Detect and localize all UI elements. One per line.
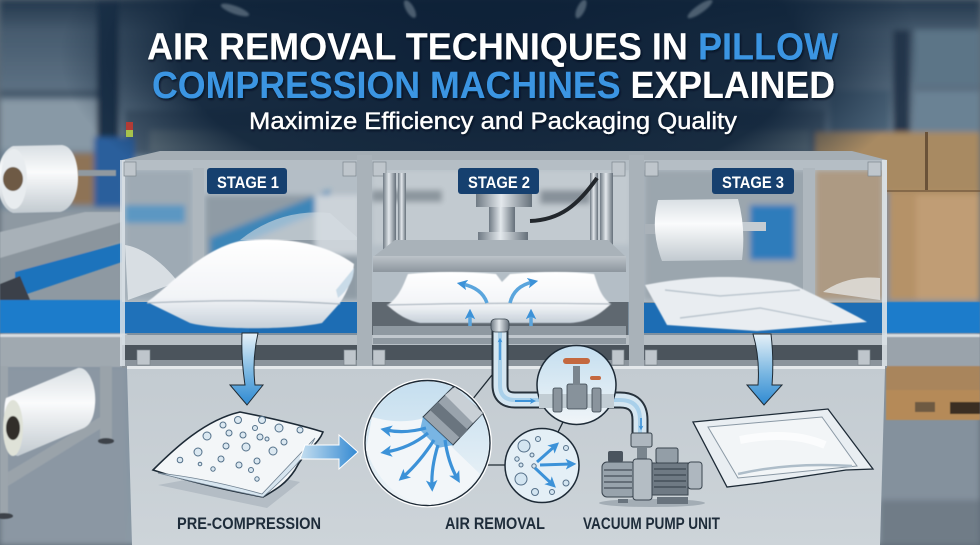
ceiling lights (220, 0, 715, 21)
reflection arc stage 1 (240, 212, 360, 240)
top dark vignette (0, 0, 980, 175)
label: pre-compression: PRE-COMPRESSION (177, 515, 321, 533)
stage 1 label (207, 168, 287, 194)
pipe from press to pump (491, 319, 641, 436)
stage 3 vacuum packed pillow (645, 277, 867, 331)
right box seams (815, 132, 980, 192)
left conveyor machine (0, 170, 130, 519)
stage 2 label (458, 168, 539, 194)
title (147, 26, 838, 107)
blurred factory seen through glass (125, 170, 883, 300)
icon: vacuum sealed flat pillow (693, 409, 873, 487)
top frame rail (122, 160, 887, 170)
subtitle: Maximize Efficiency and Packaging Quality (249, 108, 737, 135)
title: COMPRESSION MACHINES EXPLAINED (152, 65, 835, 107)
label: air removal: AIR REMOVAL (445, 515, 545, 533)
corner brackets (124, 162, 881, 365)
right conveyor and pallet (885, 302, 980, 420)
reflection pillow left (125, 245, 178, 300)
stage 1 label: STAGE 1 (217, 173, 279, 192)
film roll top left (0, 145, 78, 213)
callout: nozzle air removal lens (364, 375, 508, 506)
arrow: pre-compression to air removal (300, 435, 358, 469)
icon: pre-compression pillow with air bubbles (153, 412, 323, 508)
back film roll stage 3 (645, 199, 766, 261)
stage 3 label (712, 168, 794, 194)
conveyor belt (122, 302, 360, 333)
signal light (126, 122, 133, 137)
arrow: stage 3 down (747, 334, 782, 405)
label: vacuum pump unit: VACUUM PUMP UNIT (583, 515, 720, 533)
icon: vacuum pump unit (599, 433, 705, 507)
air flow arrows in pillow (462, 282, 533, 326)
stage 2 compressed pillow (387, 272, 611, 323)
arrow: stage 1 down (230, 333, 263, 405)
lower process panel (127, 366, 885, 545)
film roll bottom left (3, 368, 95, 456)
stage 1 pillow (147, 239, 354, 328)
title: AIR REMOVAL TECHNIQUES IN PILLOW (147, 26, 838, 68)
transparent machine enclosure (120, 151, 887, 368)
stage 2 label: STAGE 2 (468, 173, 530, 192)
callout: air bubbles lens (505, 416, 579, 502)
reflection pillow right (823, 278, 880, 300)
stage 3 label: STAGE 3 (722, 173, 784, 192)
callout: valve lens (537, 346, 616, 424)
stage 2 press (373, 173, 626, 344)
